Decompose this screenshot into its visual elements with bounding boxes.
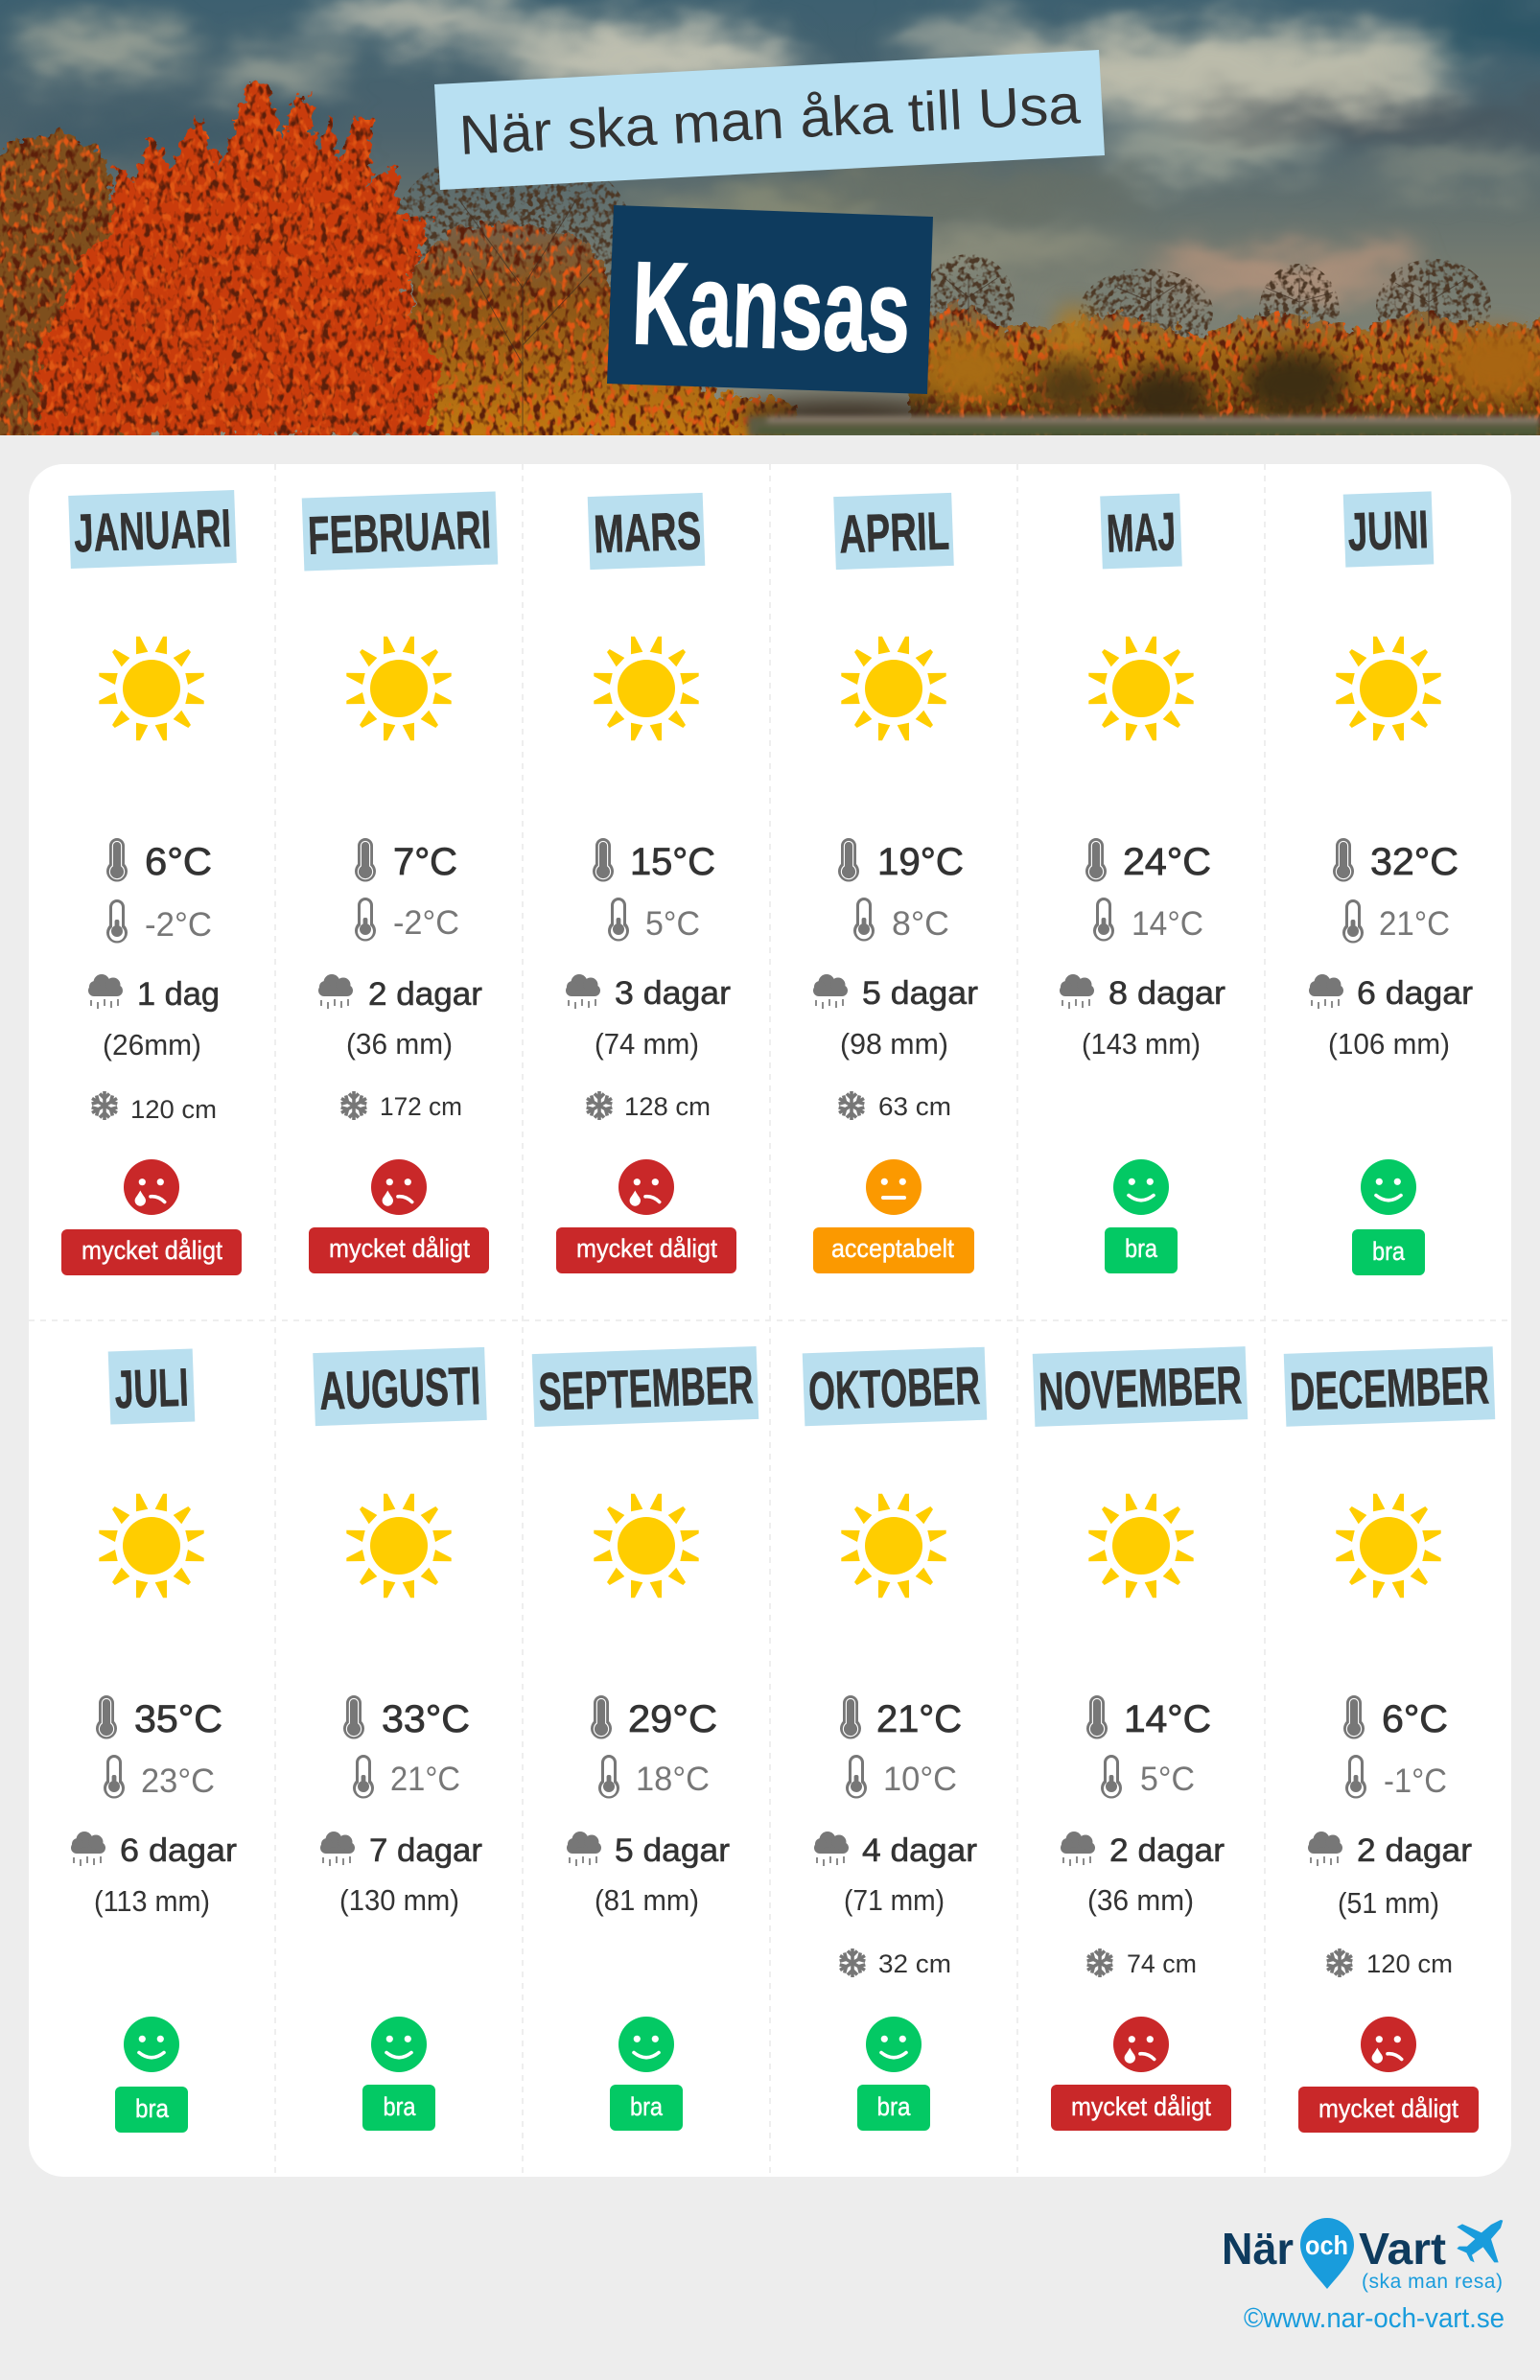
month: februari: mycket dåligt [329, 1234, 470, 1263]
panel: months table [29, 464, 1511, 2177]
month: november: mycket dåligt [1071, 2092, 1211, 2121]
month: maj: 24°C [1123, 841, 1211, 883]
month: september: (81 mm) [595, 1883, 699, 1917]
month: oktober: OKTOBER [807, 1355, 981, 1421]
month: oktober: 4 dagar [862, 1832, 977, 1869]
month: oktober: 21°C [876, 1698, 962, 1740]
month: januari: 120 cm [130, 1095, 217, 1124]
month: oktober [803, 1347, 987, 2131]
state name box [607, 205, 933, 394]
month: december: (51 mm) [1338, 1886, 1439, 1920]
month: juni: 6 dagar [1357, 975, 1473, 1012]
month: februari: -2°C [393, 904, 459, 942]
month: december: -1°C [1384, 1762, 1447, 1800]
month: november: 74 cm [1127, 1949, 1197, 1978]
month: november: 2 dagar [1109, 1832, 1225, 1869]
month: januari: 1 dag [137, 976, 220, 1013]
month: juli: 6 dagar [120, 1832, 237, 1869]
month: februari: 2 dagar [368, 976, 482, 1013]
month: november: 14°C [1124, 1698, 1211, 1740]
logo: När och Vart: och [1305, 2230, 1348, 2260]
month: maj: (143 mm) [1082, 1027, 1201, 1061]
month: oktober: 32 cm [878, 1949, 951, 1978]
month: september: 18°C [636, 1761, 710, 1798]
month: maj: 8 dagar [1108, 975, 1225, 1012]
month: december: mycket dåligt [1318, 2094, 1458, 2123]
month: april: 5 dagar [862, 975, 978, 1012]
month: maj: bra [1125, 1234, 1158, 1263]
month: september: SEPTEMBER [538, 1354, 755, 1422]
month: juni: bra [1372, 1237, 1406, 1266]
month: juni [1309, 491, 1473, 1275]
month: augusti [313, 1347, 487, 2131]
month: februari: (36 mm) [346, 1027, 453, 1061]
month: augusti: 33°C [382, 1698, 470, 1740]
month: februari [302, 491, 498, 1273]
month: juni: 32°C [1370, 841, 1458, 883]
month: april: acceptabelt [831, 1234, 954, 1263]
month: april: (98 mm) [840, 1027, 948, 1061]
month: juni: 21°C [1379, 905, 1450, 943]
month: september: bra [630, 2092, 664, 2121]
month: augusti: bra [384, 2092, 416, 2121]
month: december: 6°C [1382, 1698, 1448, 1740]
month: mars: MARS [593, 501, 702, 564]
month: december: 2 dagar [1357, 1832, 1472, 1869]
month: maj [1060, 494, 1225, 1273]
month: februari: 7°C [393, 841, 457, 883]
month: november: (36 mm) [1087, 1883, 1194, 1917]
month: april: APRIL [838, 500, 950, 564]
month: april [813, 493, 978, 1273]
month: september: 5 dagar [615, 1832, 730, 1869]
month: februari: 172 cm [380, 1092, 462, 1121]
month: december: 120 cm [1366, 1949, 1453, 1978]
month: december [1284, 1346, 1495, 2133]
month: juni: JUNI [1346, 499, 1430, 562]
title banner: När ska man åka till Usa [457, 73, 1083, 167]
month: juli: (113 mm) [94, 1884, 210, 1918]
month: november: NOVEMBER [1038, 1354, 1243, 1422]
logo: När och Vart: (ska man resa) [1362, 2271, 1503, 2293]
month: mars: 3 dagar [615, 975, 731, 1012]
month: augusti: 7 dagar [369, 1832, 482, 1869]
logo: När och Vart: ©www.nar-och-vart.se [1244, 2303, 1505, 2334]
month: januari: JANUARI [73, 498, 232, 563]
month: januari: -2°C [145, 906, 212, 944]
month: mars: 128 cm [624, 1092, 711, 1121]
month: februari: FEBRUARI [307, 499, 492, 566]
month: januari: (26mm) [103, 1028, 201, 1062]
month: juli: 35°C [134, 1698, 222, 1740]
header photo: autumn trees under a cloudy sky [0, 0, 1540, 441]
month: juli: 23°C [141, 1762, 215, 1800]
month: januari: 6°C [145, 841, 212, 883]
month: mars [556, 493, 736, 1273]
month: september [532, 1346, 758, 2131]
month: oktober: (71 mm) [844, 1883, 945, 1917]
month: juli: bra [135, 2094, 170, 2123]
logo: När och Vart [1222, 2218, 1505, 2334]
month: oktober: bra [876, 2092, 911, 2121]
month: augusti: 21°C [390, 1761, 460, 1798]
month: april: 19°C [877, 841, 964, 883]
month: mars: 15°C [630, 841, 715, 883]
month: juli: JULI [113, 1357, 190, 1419]
month: april: 8°C [892, 905, 949, 943]
month: januari: mycket dåligt [82, 1236, 222, 1265]
month: mars: 5°C [645, 905, 700, 943]
logo: När och Vart: När [1222, 2224, 1294, 2274]
month: augusti: (130 mm) [339, 1883, 459, 1917]
month: januari [61, 490, 242, 1275]
month: juni: (106 mm) [1328, 1027, 1450, 1061]
month: juli [71, 1348, 237, 2133]
logo: När och Vart: Vart [1359, 2224, 1446, 2274]
month: maj: MAJ [1106, 501, 1177, 564]
title banner [434, 50, 1105, 190]
month: september: 29°C [628, 1698, 717, 1740]
month: oktober: 10°C [883, 1761, 957, 1798]
month: mars: mycket dåligt [576, 1234, 717, 1263]
month: maj: 14°C [1132, 905, 1203, 943]
month: augusti: AUGUSTI [318, 1355, 481, 1421]
state name box: Kansas [630, 238, 912, 378]
month: mars: (74 mm) [595, 1027, 699, 1061]
month: november [1033, 1346, 1248, 2131]
month: november: 5°C [1140, 1761, 1195, 1798]
month: april: 63 cm [878, 1092, 951, 1121]
